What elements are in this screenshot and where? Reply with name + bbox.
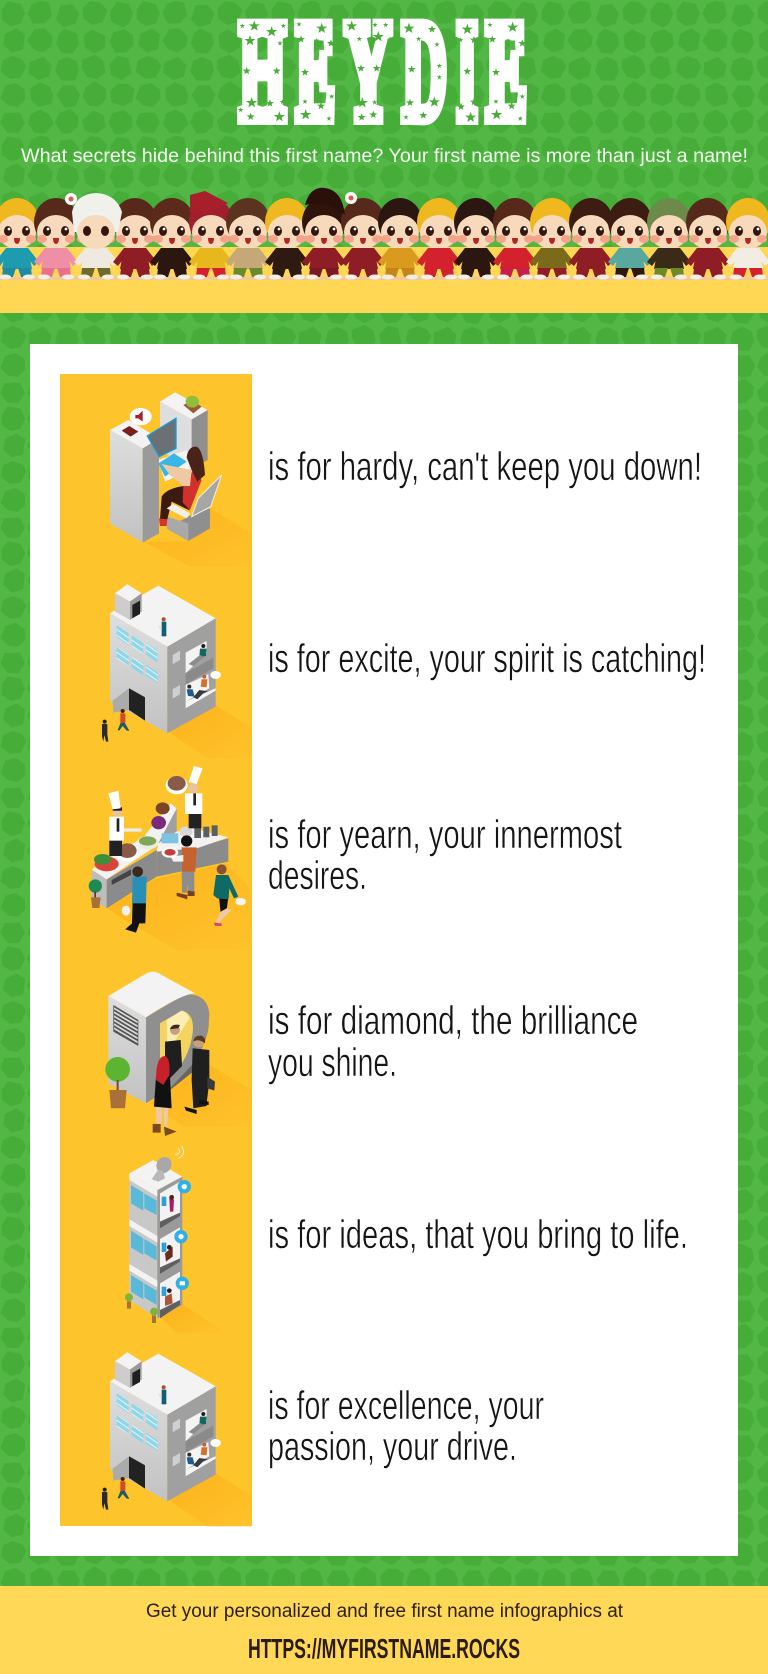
banner: yellow strip behind characters xyxy=(0,247,768,313)
text: D line xyxy=(268,999,638,1085)
panel: white content card xyxy=(30,344,738,1556)
text: Y line: is for yearn, your innermost xyxy=(268,813,622,857)
text: final E line: passion, your drive. xyxy=(268,1425,517,1469)
text: D line: you shine. xyxy=(268,1041,397,1085)
icon: letter E building with office workers xyxy=(102,584,252,758)
text: final E line xyxy=(268,1384,544,1469)
icon: letter H building with woman at desk xyxy=(110,392,252,567)
text: final E line: is for excellence, your xyxy=(268,1384,544,1428)
text: Y line xyxy=(268,813,622,898)
panel: orange illustration column xyxy=(60,374,252,1526)
title: name HEYDIE with star pattern xyxy=(238,0,527,150)
icon: letter E building repeated xyxy=(102,1352,252,1526)
footer: website url: HTTPS://MYFIRSTNAME.ROCKS xyxy=(248,1633,520,1664)
icon: letter I tower with balconies xyxy=(125,1146,227,1333)
subtitle: What secrets hide behind this first name? Your first name is more than just a name! xyxy=(21,145,748,167)
icon: letter D building with business people xyxy=(105,972,252,1136)
character parade xyxy=(0,188,768,280)
icon: letter Y buffet counter with chefs and guests xyxy=(89,766,252,950)
text: Y line: desires. xyxy=(268,854,367,898)
footer band xyxy=(0,1586,768,1674)
footer: call to action: Get your personalized and free first name infographics at xyxy=(146,1601,624,1622)
text: D line: is for diamond, the brilliance xyxy=(268,999,638,1043)
